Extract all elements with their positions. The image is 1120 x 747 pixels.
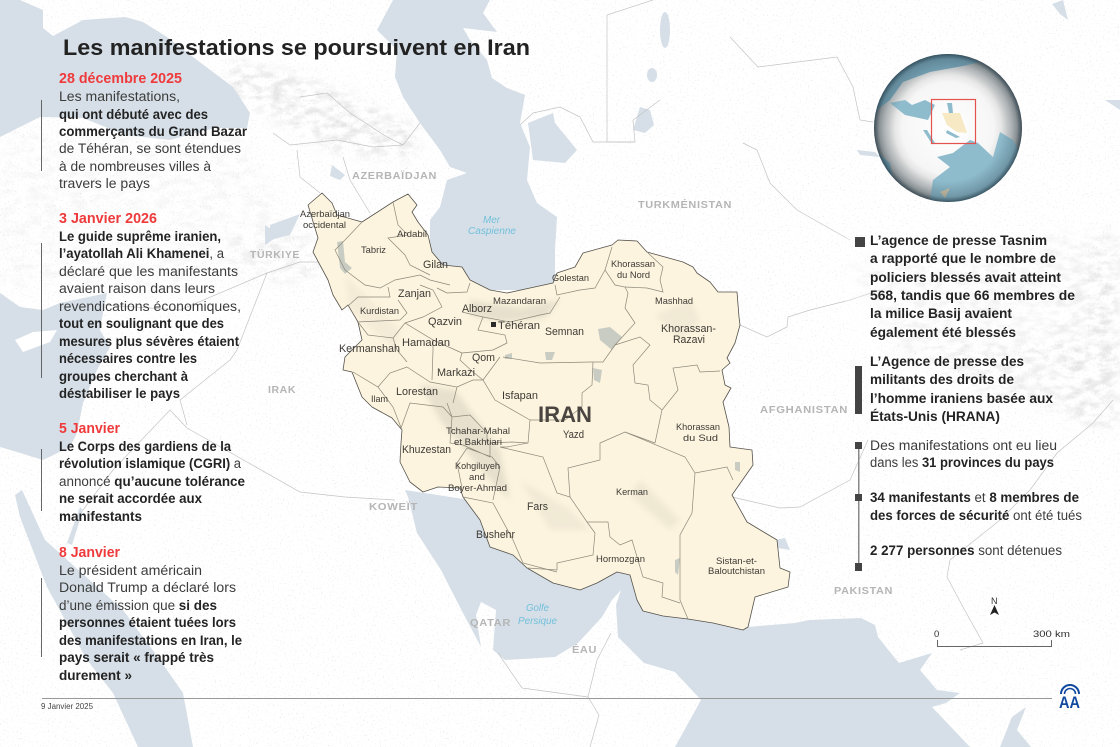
sea labels [468,215,557,627]
province labels: Azerbaïdjan [300,209,350,220]
panel: Tasnim [845,233,1088,344]
entry: 3 janvier 2026: déstabiliser le pays [59,386,180,401]
Iran territory [308,193,790,630]
entry: 8 janvier: pays serait « frappé très [59,650,214,665]
country labels: ÉAU [572,643,597,656]
country labels: PAKISTAN [834,585,893,597]
panel: Tasnim: 568, tandis que 66 membres de [870,288,1075,303]
entry: 5 janvier: Le Corps des gardiens de la [59,439,232,454]
province labels: Tchahar-Mahal [446,426,510,437]
icon: square bullet [855,237,865,247]
province labels: Sistan-et- [716,556,757,567]
province labels: Qom [472,352,495,364]
province labels: Kurdistan [360,306,399,317]
panel: HRANA figures [855,438,1082,571]
entry: 5 janvier: ne serait accordée aux [59,491,203,506]
province labels: Mazandaran [493,296,546,307]
entry: 8 janvier [41,545,242,683]
province labels: Semnan [545,326,584,338]
entry: 3 janvier 2026: groupes cherchant à [59,369,189,384]
province labels: du Nord [617,270,650,281]
province labels: Isfapan [502,390,538,402]
footer: rule and date: 9 Janvier 2025 [41,702,94,711]
province labels: Ilam [371,394,388,405]
province labels: Golestan [552,273,589,284]
icon: north arrow [990,596,999,615]
panel: Tasnim: la milice Basij avaient [870,306,1013,321]
scale bar: 300 km [1033,629,1070,640]
province labels: Téhéran [498,320,540,332]
locator frame [932,100,976,144]
panel: HRANA figures: Des manifestations ont eu lieu [870,438,1057,453]
entry: 5 janvier: annoncé qu’aucune tolérance [59,474,245,489]
province labels: Kermanshah [339,343,400,355]
province labels: et Bakhtiari [454,437,502,448]
sea: Red Sea [15,490,193,747]
province labels: Hamadan [402,337,450,349]
panel: HRANA heading [855,354,1054,424]
sea: Gulf of Cambay [1000,707,1031,747]
province labels: Fars [527,501,548,513]
panel: HRANA heading: États-Unis (HRANA) [870,409,1000,424]
province labels: Boyer-Ahmad [448,483,507,494]
entry: 3 janvier 2026: nécessaires contre les [59,351,197,366]
entry: 8 janvier: Le président américain [59,563,202,578]
sea: Cyprus island [15,330,57,352]
scale bar [934,629,1070,646]
entry: 3 janvier 2026: revendications économiques, [59,299,241,314]
entry: 8 janvier: Donald Trump a déclaré lors [59,580,236,595]
province labels: Khuzestan [402,444,451,456]
scale bar: 0 [934,629,939,640]
province labels: and [469,472,485,483]
panel: Tasnim: policiers blessés avait atteint [870,270,1062,285]
country labels: TÜRKIYE [250,248,300,261]
entry: 8 janvier: personnes étaient tuées lors [59,615,236,630]
entry: 8 janvier: 8 Janvier [59,545,120,561]
sea labels: Caspienne [468,226,516,237]
entry: 3 janvier 2026: avaient raison dans leurs [59,281,215,296]
province labels: Khorassan [611,259,655,270]
province labels: Bushehr [476,529,515,541]
sea: Persian Gulf, Gulf of Oman, Arabian Sea [405,490,970,747]
province labels: Lorestan [396,386,438,398]
icon: AA logo [1059,685,1080,712]
province labels: Gilan [423,259,448,271]
entry: 5 janvier: 5 Janvier [59,421,120,437]
panel: HRANA figures: 2 277 personnes sont détenues [870,543,1062,558]
entry: 8 janvier: d’une émission que si des [59,598,217,613]
panel: timeline text [41,71,248,683]
sea: Kara-Bogaz [528,113,577,163]
entry: 5 janvier: manifestants [59,509,142,524]
province labels: Zanjan [398,288,431,300]
country labels [250,169,893,656]
entry: 3 janvier 2026: Le guide suprême iranien, [59,229,221,244]
province labels: Yazd [563,429,584,441]
panel: HRANA figures: dans les 31 provinces du pays [870,455,1054,470]
panel: Tasnim: L’agence de presse Tasnim [870,233,1047,248]
panel: HRANA heading: l’homme iraniens basée aux [870,391,1054,406]
lakes [265,0,1120,550]
panel: HRANA figures: 34 manifestants et 8 membres de [870,490,1079,505]
province labels: Baloutchistan [708,566,765,577]
entry: 28 décembre 2025: Les manifestations, [59,89,180,104]
title: Les manifestations se poursuivent en Iran [63,35,530,60]
province labels: Razavi [673,334,705,346]
entry: 3 janvier 2026: 3 Janvier 2026 [59,211,157,227]
entry: 28 décembre 2025: 28 décembre 2025 [59,71,182,87]
province labels: IRAN [538,402,592,427]
entry: 3 janvier 2026: tout en soulignant que des [59,316,224,331]
entry: 3 janvier 2026: l’ayatollah Ali Khamenei, a [59,246,225,261]
province boundaries [335,202,733,619]
country labels: KOWEÏT [369,500,418,513]
sea: Gulf of Aqaba [67,507,83,545]
province labels: Mashhad [655,296,693,307]
entry: 28 décembre 2025: de Téhéran, se sont étendues [59,141,241,156]
sea labels: Mer [483,215,501,226]
province labels: du Sud [683,433,718,444]
sea: Mediterranean [0,293,110,460]
locator globe [870,50,1022,205]
panel: HRANA figures: des forces de sécurité ont été tués [870,508,1082,523]
panel: Tasnim: également été blessés [870,325,1016,340]
province labels: Kerman [616,487,648,498]
province labels: Ardabil [397,229,427,240]
entry: 5 janvier [41,421,245,524]
province labels: Alborz [462,303,492,315]
country labels: TURKMÉNISTAN [638,198,732,211]
entry: 5 janvier: révolution islamique (CGRI) a [59,456,242,471]
country labels: AFGHANISTAN [760,404,848,416]
sea: Black Sea [0,0,250,140]
country labels: IRAK [268,384,296,396]
sea labels: Golfe [526,603,549,614]
sea labels: Persique [518,616,557,627]
entry: 8 janvier: durement » [59,668,132,683]
province labels [300,209,765,577]
province labels: Tabriz [361,245,386,256]
relief and salt lakes inside Iran [337,241,740,575]
panel: HRANA heading: militants des droits de [870,372,1014,387]
sea: Caspian [377,0,557,290]
panel: HRANA heading: L’Agence de presse des [870,354,1024,369]
province labels: Khorassan- [661,323,716,335]
entry: 28 décembre 2025: qui ont débuté avec des [59,107,208,122]
entry: 3 janvier 2026: déclaré que les manifestants [59,264,238,279]
country labels: AZERBAÏDJAN [352,169,437,182]
entry: 3 janvier 2026 [41,211,241,401]
province labels: Khorassan [676,422,720,433]
entry: 28 décembre 2025: à de nombreuses villes à [59,159,212,174]
province labels: Markazi [437,367,475,379]
entry: 3 janvier 2026: mesures plus sévères étaient [59,334,240,349]
province labels: Qazvin [428,316,462,328]
entry: 8 janvier: des manifestations en Iran, le [59,633,242,648]
panel: Tasnim: a rapporté que le nombre de [870,251,1056,266]
map: Iran with provinces [300,193,790,630]
icon: north arrow: N [991,596,998,606]
province labels: occidental [303,220,346,231]
province labels: Hormozgan [596,554,645,565]
entry: 28 décembre 2025 [41,71,248,191]
icon: AA logo: AA [1059,693,1080,712]
entry: 28 décembre 2025: commerçants du Grand Bazar [59,124,248,139]
entry: 28 décembre 2025: travers le pays [59,176,150,191]
province labels: Kohgiluyeh [455,461,500,472]
country labels: QATAR [470,617,511,629]
